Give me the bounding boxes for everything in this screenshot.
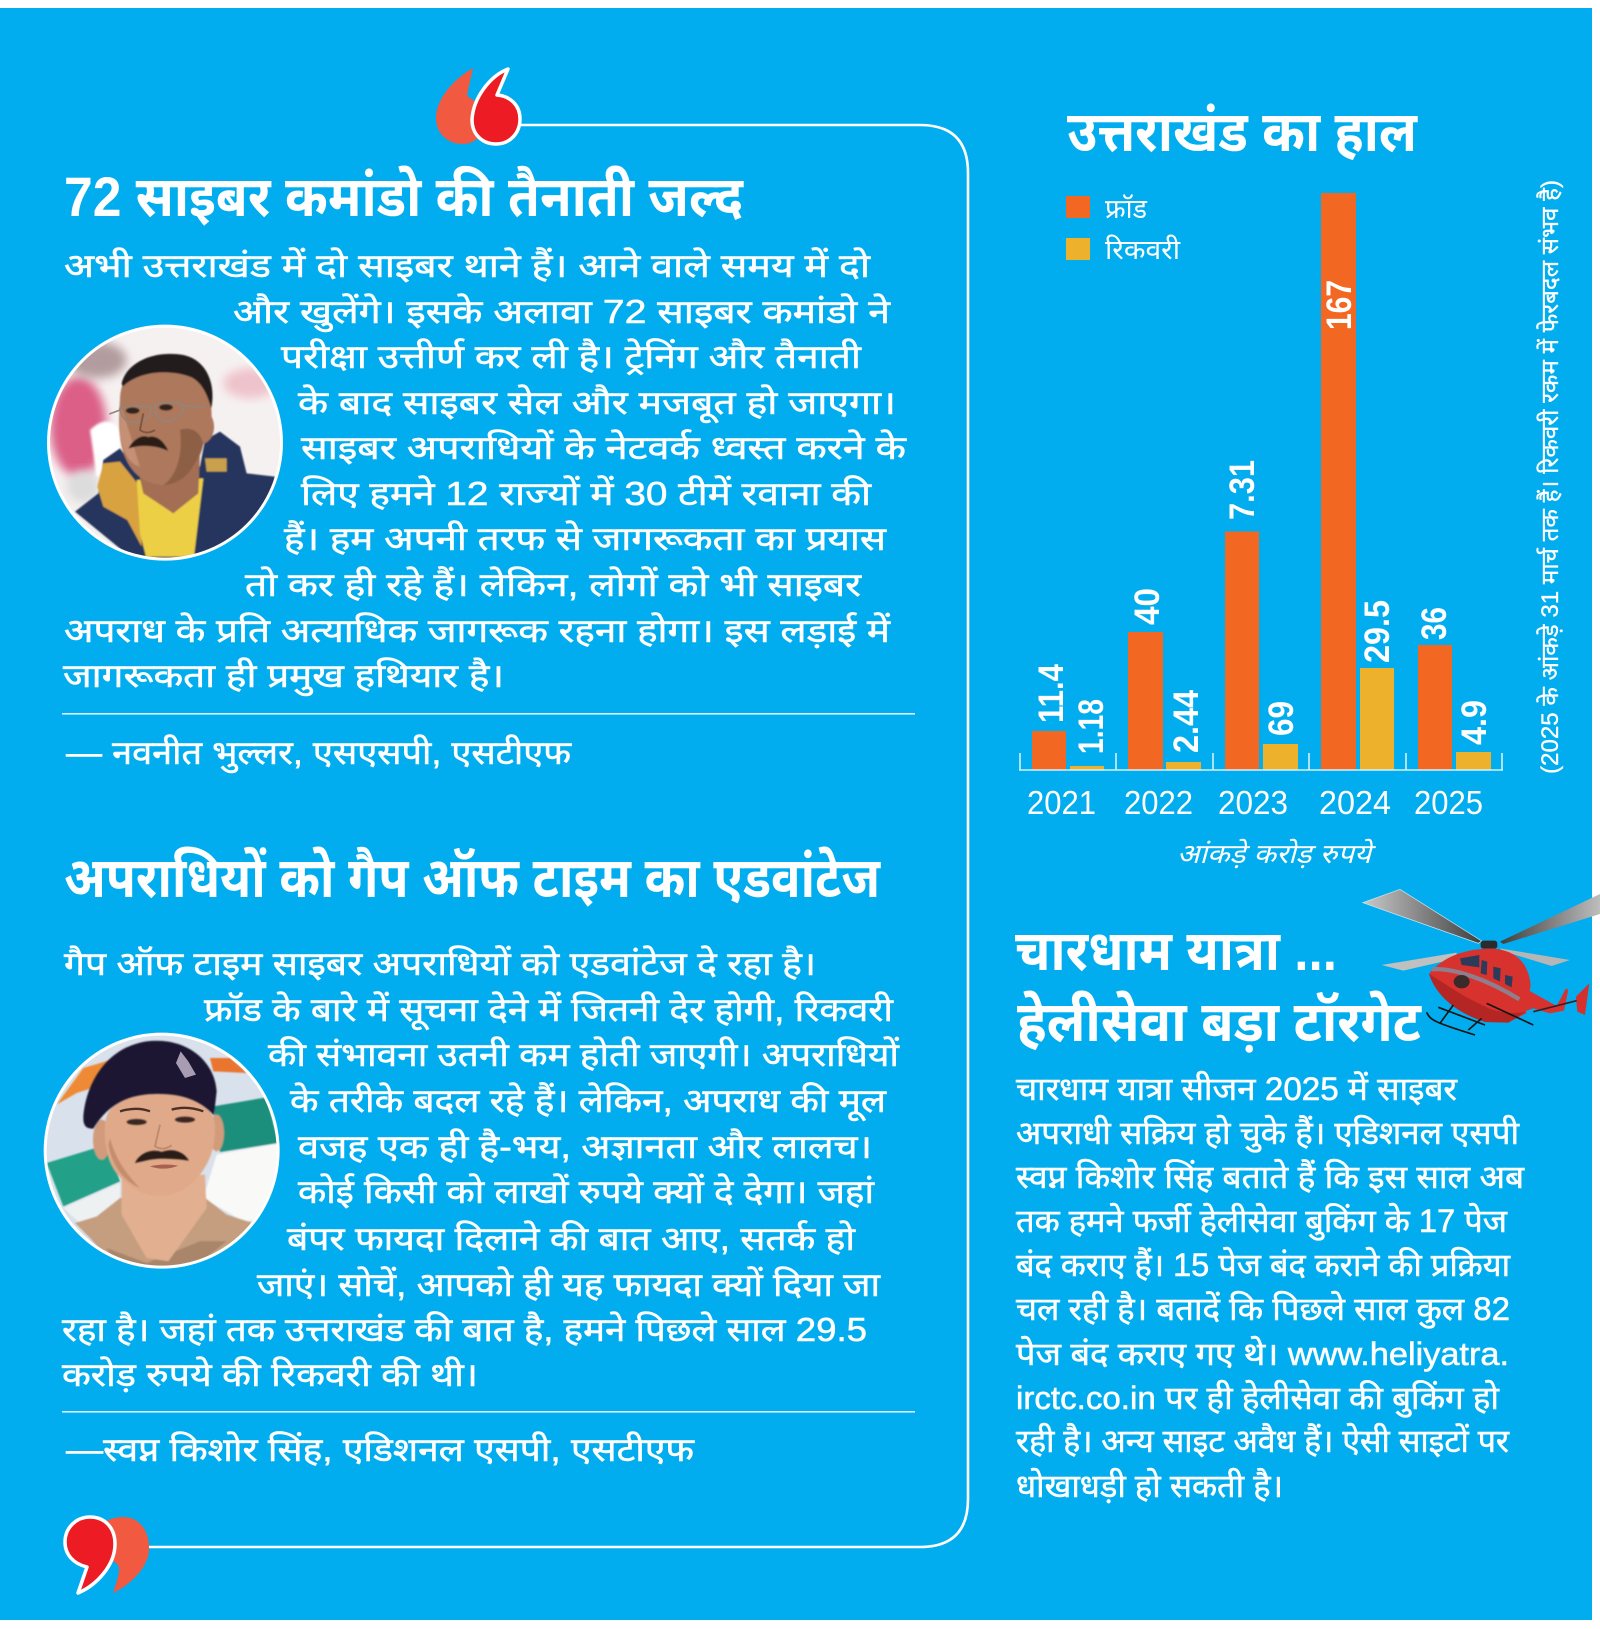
photo: Swapn Kishore Singh portrait (40, 1028, 290, 1273)
text block: second quote: वजह एक ही है-भय, अज्ञानता और लालच। (298, 1127, 872, 1165)
text block: first quote: परीक्षा उत्तीर्ण कर ली है। ट्रेनिंग और तैनाती (281, 337, 863, 376)
value labels: 4.9 (1455, 700, 1494, 745)
value labels: 1.18 (1072, 699, 1111, 754)
text block: Chardham story (1016, 1071, 1525, 1504)
eyes (127, 1119, 147, 1125)
legend (1066, 194, 1181, 265)
face (104, 1093, 215, 1180)
beret (83, 1041, 217, 1129)
neck (122, 1175, 207, 1261)
chart title: उत्तराखंड का हाल (1067, 100, 1419, 163)
side note: (2025 के आंकड़े 31 मार्च तक हैं। रिकवरी रकम में फेरबदल संभव है) (1536, 180, 1564, 774)
text block: first quote: तो कर ही रहे हैं। लेकिन, लोगों को भी साइबर (245, 565, 862, 603)
fuselage (1429, 949, 1531, 1023)
frame outline (148, 125, 968, 1547)
text block: first quote: लिए हमने 12 राज्यों में 30 टीमें रवाना की (301, 474, 873, 512)
text block: second quote: की संभावना उतनी कम होती जाएगी। अपराधियों (268, 1036, 901, 1073)
icon: closing quote mark (65, 1517, 149, 1593)
text block: Chardham story: चल रही है। बतादें कि पिछले साल कुल 82 (1016, 1291, 1510, 1329)
text block: first quote: और खुलेंगे। इसके अलावा 72 साइबर कमांडो ने (233, 292, 891, 332)
attribution: Navneet Bhullar: — नवनीत भुल्लर, एसएसपी, एसटीएफ (66, 734, 572, 773)
flag green (213, 1097, 278, 1152)
text block: first quote: के बाद साइबर सेल और मजबूत हो जाएगा। (298, 383, 896, 423)
badge (176, 1051, 196, 1078)
heading: gap of time advantage: अपराधियों को गैप ऑफ टाइम का एडवांटेज (64, 846, 881, 909)
attribution: Swapn Kishore Singh: —स्वप्न किशोर सिंह, एडिशनल एसपी, एसटीएफ (66, 1431, 695, 1468)
text block: second quote: बंपर फायदा दिलाने की बात आए, सतर्क हो (287, 1219, 857, 1257)
value labels: 2.44 (1167, 690, 1206, 753)
year labels: 2025 (1414, 784, 1483, 821)
text block: first quote (63, 246, 907, 696)
value labels: 29.5 (1358, 600, 1397, 663)
year labels (1027, 784, 1483, 821)
tail (1523, 988, 1568, 1013)
heading: Chardham Yatra (1015, 919, 1422, 1053)
text block: Chardham story: irctc.co.in पर ही हेलीसेवा की बुकिंग हो (1016, 1380, 1500, 1418)
panel: Uttarakhand chart (1019, 100, 1564, 869)
moustache (135, 1150, 189, 1163)
glasses (109, 402, 205, 423)
unit note: आंकड़े करोड़ रुपये (1177, 838, 1377, 869)
year labels: 2023 (1218, 784, 1288, 821)
photo: Navneet Bhullar portrait (40, 320, 290, 565)
value labels: 36 (1415, 607, 1454, 640)
value labels: 11.4 (1032, 664, 1071, 723)
heading: Chardham Yatra: हेलीसेवा बड़ा टॉरगेट (1017, 990, 1422, 1053)
text block: Chardham story: अपराधी सक्रिय हो चुके हैं। एडिशनल एसपी (1016, 1115, 1520, 1153)
collar (97, 462, 142, 547)
heading: Chardham Yatra: चारधाम यात्रा ... (1015, 919, 1337, 982)
flag white (203, 1143, 282, 1221)
text block: second quote: जाएं। सोचें, आपको ही यह फायदा क्यों दिया जा (257, 1266, 882, 1303)
text block: second quote: गैप ऑफ टाइम साइबर अपराधियों को एडवांटेज दे रहा है। (64, 944, 816, 982)
ears (93, 1120, 110, 1160)
year labels: 2024 (1319, 784, 1391, 821)
text block: Chardham story: धोखाधड़ी हो सकती है। (1016, 1468, 1283, 1504)
text block: second quote (62, 944, 901, 1393)
flag orange (57, 1060, 112, 1105)
text block: first quote: जागरूकता ही प्रमुख हथियार है। (63, 656, 504, 696)
icon: red helicopter (1363, 889, 1600, 1035)
text block: second quote: के तरीके बदल रहे हैं। लेकिन, अपराध की मूल (290, 1081, 887, 1121)
jacket (75, 432, 275, 565)
value labels: 69 (1262, 701, 1301, 736)
shirt (74, 1197, 252, 1264)
legend: recovery: रिकवरी (1105, 235, 1181, 265)
shirt (137, 478, 203, 557)
text block: first quote: हैं। हम अपनी तरफ से जागरूकता का प्रयास (284, 519, 887, 557)
text block: second quote: कोई किसी को लाखों रुपये क्यों दे देगा। जहां (298, 1172, 876, 1210)
heading: 72 cyber commandos: 72 साइबर कमांडो की तैनाती जल्द (64, 165, 744, 228)
panel: Chardham helicopter story (1015, 889, 1600, 1504)
text block: Chardham story: पेज बंद कराए गए थे। www.heliyatra. (1016, 1336, 1509, 1372)
text block: Chardham story: चारधाम यात्रा सीजन 2025 में साइबर (1016, 1071, 1458, 1107)
icon: opening quote mark (436, 68, 520, 144)
value labels (1032, 280, 1494, 754)
text block: second quote: रहा है। जहां तक उत्तराखंड की बात है, हमने पिछले साल 29.5 (62, 1310, 867, 1348)
value labels: 7.31 (1223, 460, 1262, 520)
year labels: 2022 (1124, 784, 1193, 821)
year labels: 2021 (1027, 784, 1096, 821)
text block: first quote: अभी उत्तराखंड में दो साइबर थाने हैं। आने वाले समय में दो (64, 246, 872, 284)
bar chart (1019, 193, 1503, 821)
text block: Chardham story: तक हमने फर्जी हेलीसेवा बुकिंग के 17 पेज (1016, 1203, 1508, 1241)
text block: Chardham story: बंद कराए हैं। 15 पेज बंद कराने की प्रक्रिया (1016, 1247, 1511, 1283)
legend: fraud: फ्रॉड (1105, 194, 1148, 224)
neck (137, 453, 200, 513)
hair (122, 354, 212, 408)
value labels: 167 (1320, 280, 1359, 330)
text block: second quote: करोड़ रुपये की रिकवरी की थी। (62, 1355, 478, 1393)
text block: Chardham story: स्वप्न किशोर सिंह बताते हैं कि इस साल अब (1016, 1159, 1525, 1195)
panel: quotes frame (65, 68, 968, 1593)
text block: first quote: अपराध के प्रति अत्याधिक जागरूक रहना होगा। इस लड़ाई में (64, 611, 891, 649)
face (119, 362, 214, 485)
text block: Chardham story: रही है। अन्य साइट अवैध हैं। ऐसी साइटों पर (1016, 1423, 1510, 1459)
moustache (129, 437, 168, 451)
value labels: 40 (1128, 588, 1167, 625)
text block: first quote: साइबर अपराधियों के नेटवर्क ध्वस्त करने के (301, 428, 907, 466)
text block: second quote: फ्रॉड के बारे में सूचना देने में जितनी देर होगी, रिकवरी (204, 990, 895, 1030)
